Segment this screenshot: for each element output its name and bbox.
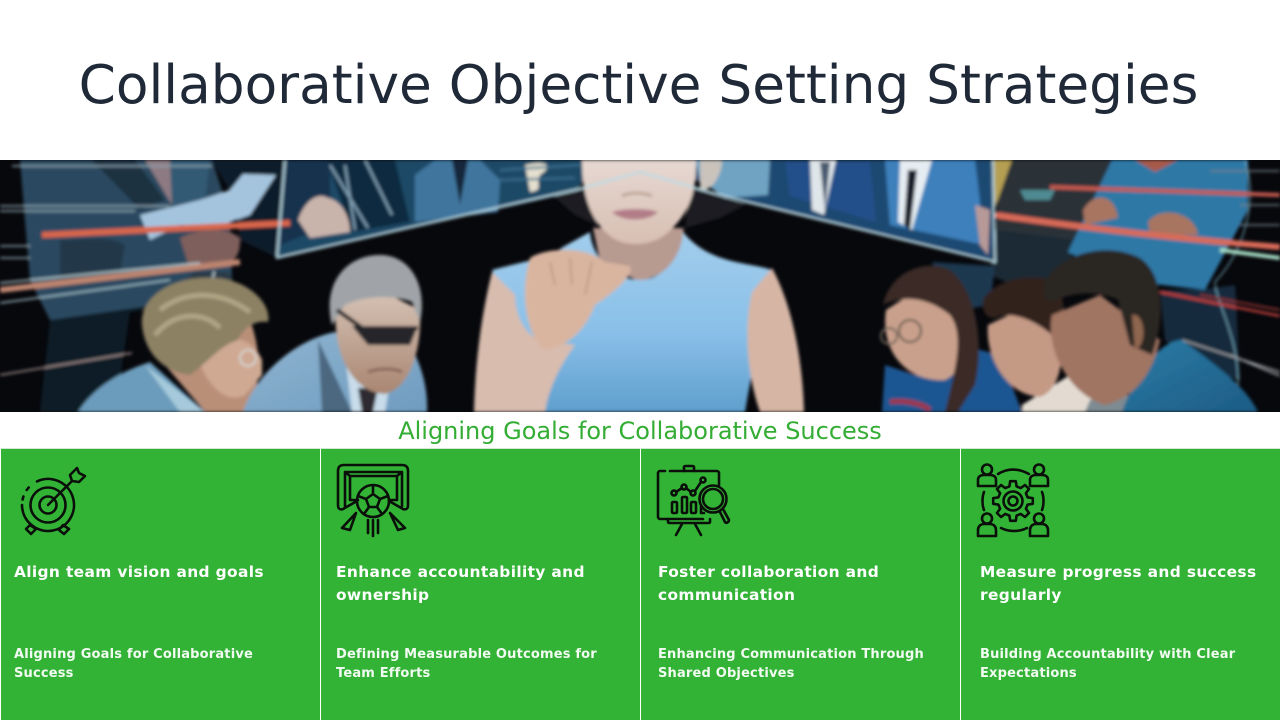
light streaks (0, 166, 1280, 376)
younger woman, right front (983, 277, 1140, 412)
text block: Aligning Goals for Collaborative Success (14, 647, 253, 681)
heading: Enhance accountability and ownership (336, 563, 585, 604)
panel: measure progress (961, 449, 1280, 720)
heading: Align team vision and goals (14, 563, 264, 581)
older man with glasses (243, 255, 427, 412)
text block: Building Accountability with Clear Expectations (980, 647, 1235, 681)
left background suited figure (20, 160, 290, 412)
title: Collaborative Objective Setting Strategies (79, 54, 1198, 116)
icon: people around gear (976, 463, 1050, 538)
right background suited figures (932, 160, 1250, 385)
man in teal jacket, right front (1043, 250, 1258, 412)
subtitle: Aligning Goals for Collaborative Success (398, 417, 882, 445)
right hologram screen (695, 160, 995, 262)
panel: enhance accountability (321, 449, 640, 720)
central woman (474, 160, 804, 412)
text block: Defining Measurable Outcomes for Team Efforts (336, 647, 597, 681)
panel: foster collaboration (641, 449, 960, 720)
woman with glasses, right front (881, 266, 1022, 412)
icon: presentation board with magnifier (656, 464, 730, 536)
left hologram screen (277, 160, 600, 258)
heading: Measure progress and success regularly (980, 563, 1256, 604)
banner image: team around holographic screens (0, 160, 1280, 412)
icon: soccer goal and ball (336, 464, 410, 538)
text block: Enhancing Communication Through Shared Objectives (658, 647, 924, 681)
icon: target with arrow (20, 466, 86, 536)
panel: align team vision (1, 449, 320, 720)
heading: Foster collaboration and communication (658, 563, 879, 604)
hologram edge lines (277, 160, 995, 262)
older woman, left front (78, 278, 268, 412)
